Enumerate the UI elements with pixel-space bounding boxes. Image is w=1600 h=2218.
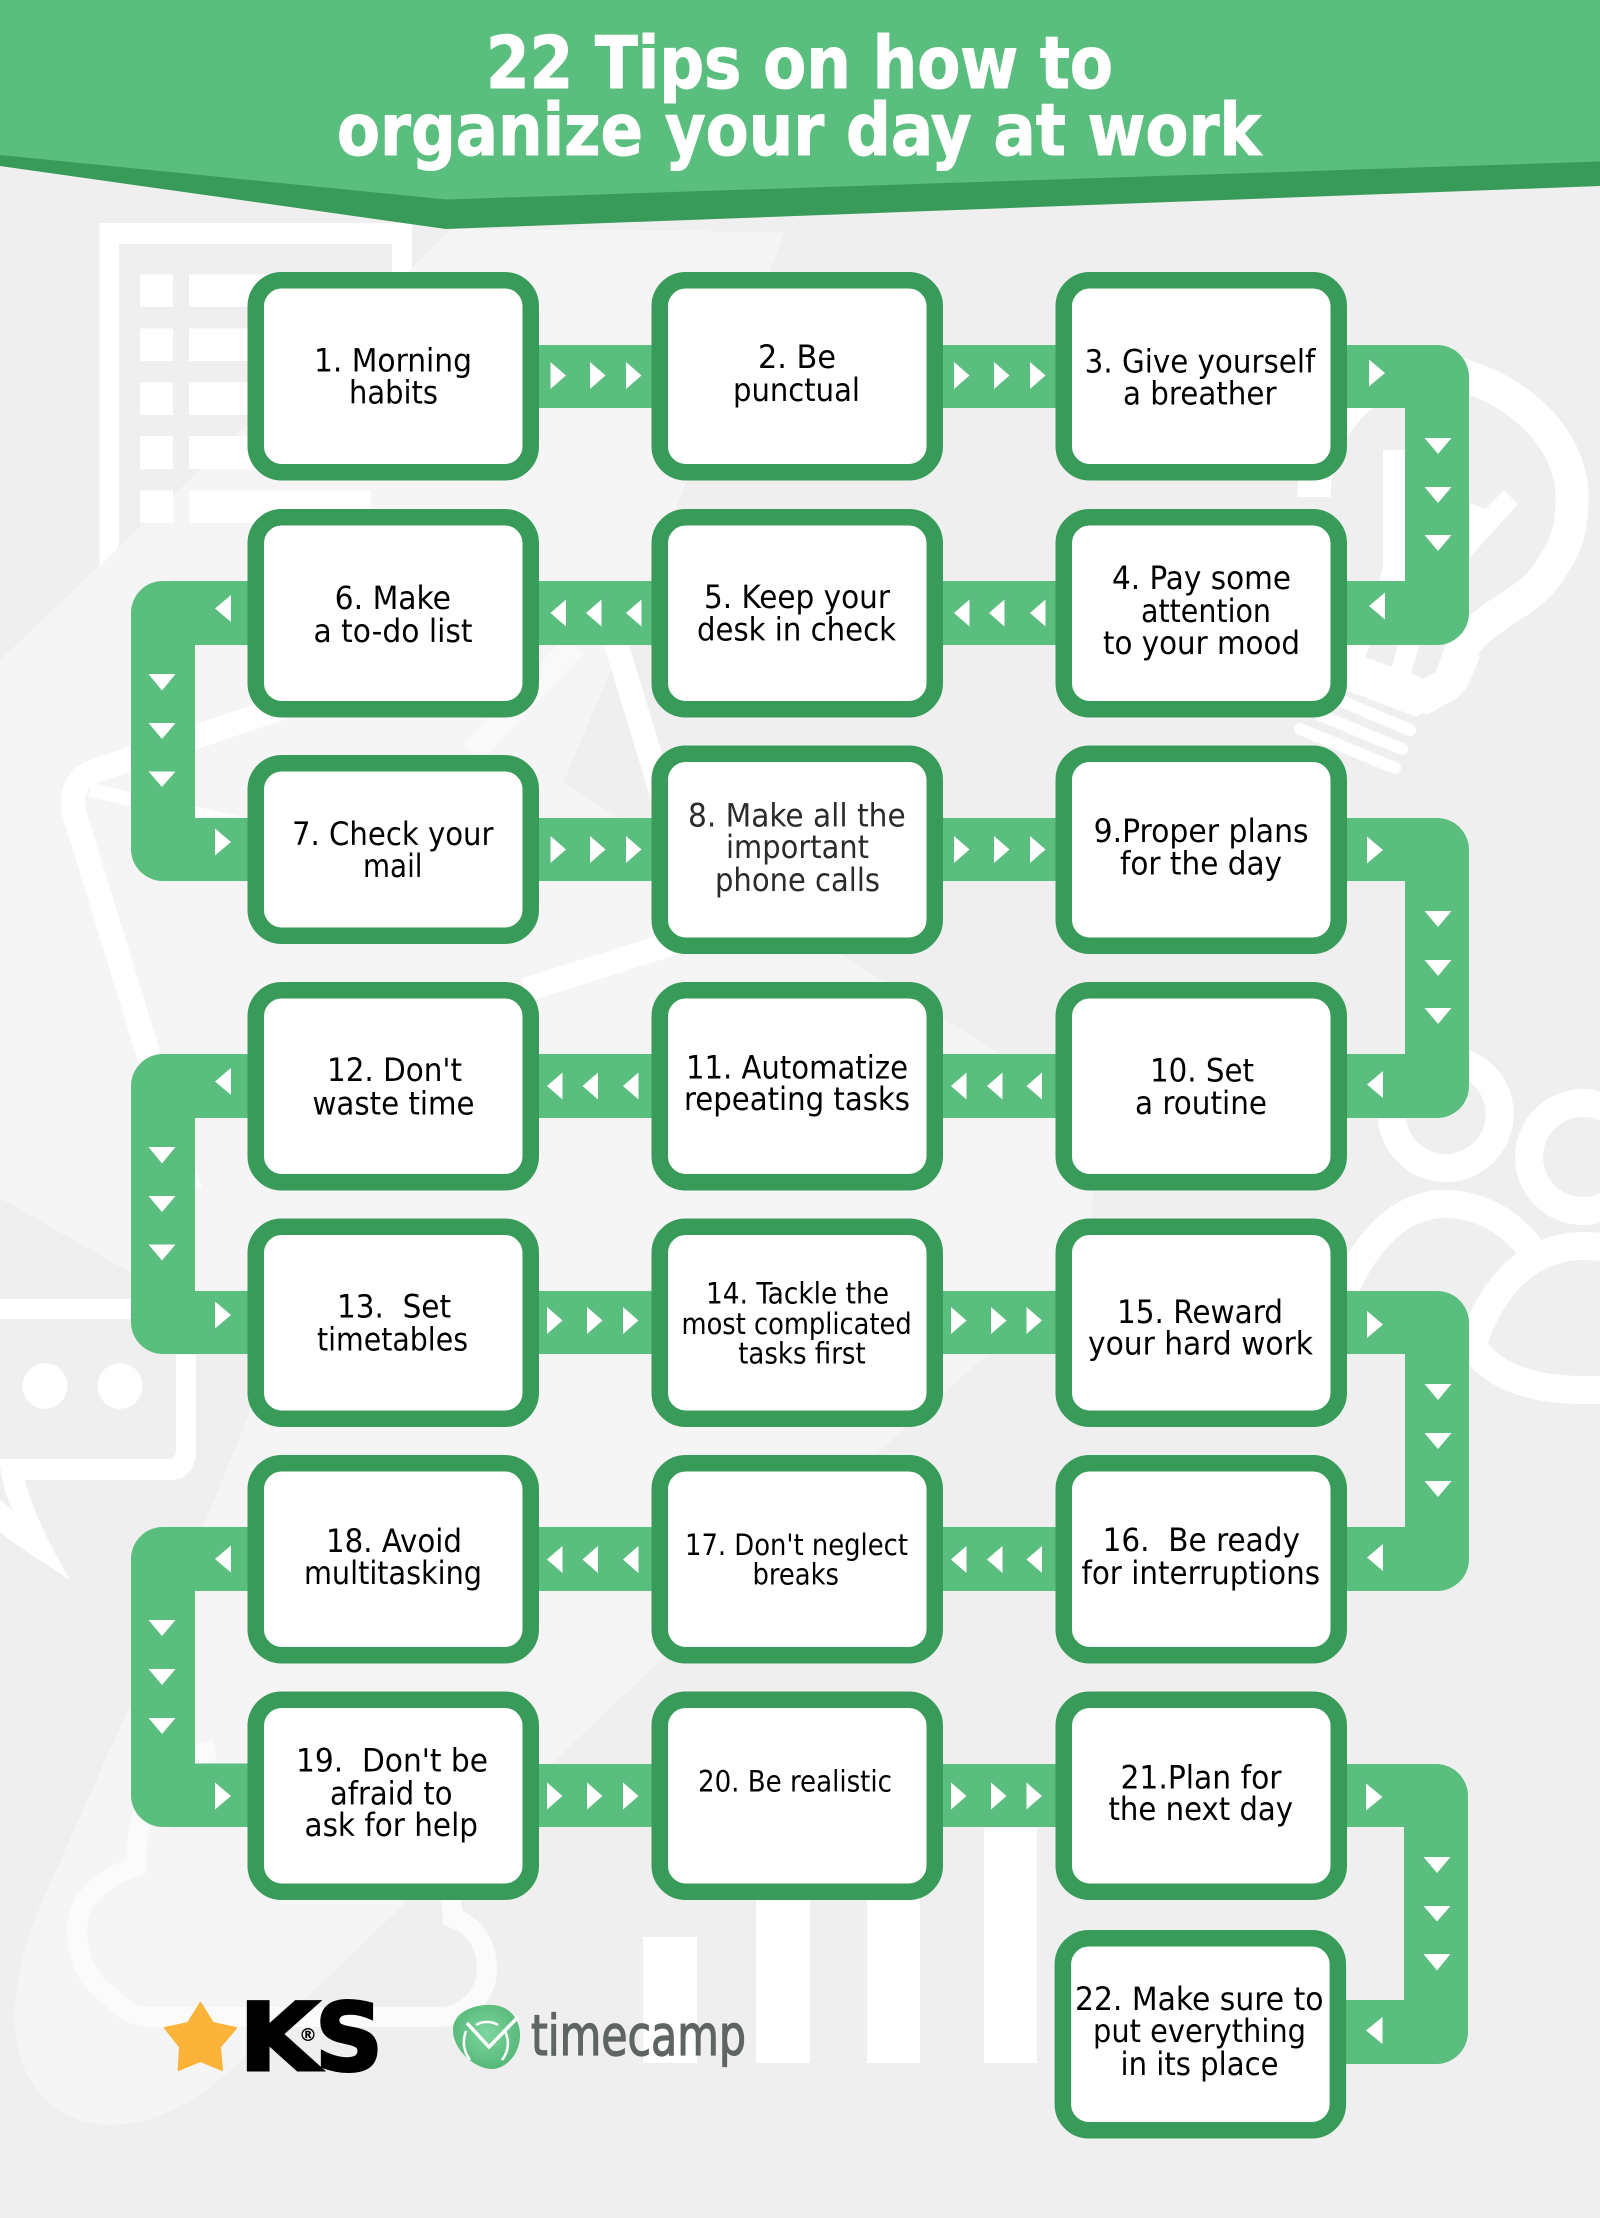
step 19: afraid to	[330, 1775, 452, 1813]
step 22	[1063, 1938, 1338, 2130]
connector: step 17 to 18	[535, 1527, 655, 1591]
step 5	[660, 517, 935, 709]
logo: timecamp	[453, 2004, 746, 2069]
step 6: a to-do list	[314, 612, 472, 650]
step 2	[660, 280, 935, 472]
step 17: 17. Don't neglect	[685, 1528, 908, 1562]
step 11	[660, 990, 935, 1182]
step 16: 16. Be ready	[1103, 1521, 1300, 1559]
connector: step 3 to 4	[1343, 345, 1469, 645]
background icon: light bulb	[1300, 368, 1572, 768]
step 20	[660, 1700, 935, 1892]
step 18: 18. Avoid	[326, 1522, 462, 1560]
background: light diagonal shape	[0, 229, 1093, 2125]
background icon: envelope	[73, 640, 690, 1190]
step 10	[1064, 990, 1339, 1182]
step 11: repeating tasks	[684, 1080, 910, 1118]
connector: step 21 to 22	[1343, 1764, 1468, 2064]
connector: step 2 to 3	[939, 345, 1059, 408]
step 19	[256, 1700, 531, 1892]
step 3: a breather	[1123, 374, 1277, 412]
connector: step 14 to 15	[939, 1291, 1059, 1354]
step 13: 13. Set	[337, 1288, 451, 1326]
step 17: breaks	[752, 1557, 839, 1591]
icon: star	[165, 2003, 236, 2070]
step 22: in its place	[1120, 2045, 1278, 2083]
connector: step 7 to 8	[535, 818, 655, 881]
step 20: 20. Be realistic	[698, 1764, 892, 1798]
step 7: mail	[363, 847, 422, 885]
connector: step 9 to 10	[1343, 818, 1469, 1118]
connector: step 5 to 6	[535, 581, 655, 645]
connector: step 4 to 5	[939, 581, 1059, 645]
step 8: 8. Make all the	[688, 797, 906, 835]
step 4: to your mood	[1103, 624, 1300, 662]
step 14: 14. Tackle the	[706, 1277, 889, 1311]
step 6: 6. Make	[335, 579, 451, 617]
step 9	[1064, 754, 1339, 946]
step 15: 15. Reward	[1117, 1293, 1283, 1331]
step 2: 2. Be	[758, 338, 836, 376]
step 8: important	[726, 828, 869, 866]
step 8: phone calls	[715, 861, 880, 899]
step 7: 7. Check your	[292, 815, 494, 853]
title: 22 Tips on how to	[486, 21, 1113, 105]
step 7	[256, 763, 531, 936]
connector: step 13 to 14	[535, 1291, 655, 1354]
title	[337, 21, 1263, 172]
connector: step 10 to 11	[939, 1054, 1059, 1118]
title: organize your day at work	[337, 88, 1263, 172]
step 18: multitasking	[304, 1554, 482, 1592]
connector: step 20 to 21	[939, 1764, 1059, 1827]
step 21: the next day	[1108, 1790, 1293, 1828]
logo: KS	[165, 1984, 383, 2093]
step 19: ask for help	[304, 1806, 478, 1844]
step 17	[660, 1463, 935, 1655]
step 1	[256, 280, 531, 472]
connector: step 16 to 17	[939, 1527, 1059, 1591]
step 14: most complicated	[682, 1307, 912, 1341]
step 15	[1064, 1227, 1339, 1419]
logo: KS: S	[315, 1984, 383, 2093]
step 5: desk in check	[697, 611, 896, 649]
connector: step 15 to 16	[1343, 1291, 1469, 1591]
step 15: your hard work	[1088, 1324, 1313, 1362]
step 12: 12. Don't	[327, 1051, 462, 1089]
background icon: calendar	[100, 223, 412, 566]
connector: step 1 to 2	[535, 345, 655, 408]
step 8	[660, 754, 935, 946]
step 9: 9.Proper plans	[1094, 812, 1309, 850]
icon: timecamp pin	[453, 2005, 520, 2069]
background icon: people	[1340, 1060, 1600, 1390]
step 5: 5. Keep your	[704, 578, 890, 616]
step 21	[1064, 1700, 1339, 1892]
background icon: bar chart	[643, 1800, 1037, 2063]
background icon: cloud	[77, 1750, 487, 2017]
step 9: for the day	[1120, 844, 1282, 882]
step 4: 4. Pay some	[1112, 559, 1291, 597]
step 14: tasks first	[738, 1336, 866, 1370]
step 11: 11. Automatize	[686, 1049, 908, 1087]
header banner	[0, 0, 1600, 229]
step 12	[256, 990, 531, 1182]
step 18	[256, 1463, 531, 1655]
step 14	[660, 1227, 935, 1419]
step 13	[256, 1227, 531, 1419]
connector: step 8 to 9	[939, 818, 1059, 881]
step 12: waste time	[312, 1084, 474, 1122]
step 4	[1064, 517, 1339, 709]
step 19: 19. Don't be	[296, 1742, 488, 1780]
connector: step 18 to 19	[131, 1527, 251, 1827]
connector: step 12 to 13	[131, 1054, 251, 1354]
step 22: 22. Make sure to	[1075, 1980, 1324, 2018]
step 10: 10. Set	[1150, 1052, 1254, 1090]
logo: KS: ®	[299, 2025, 317, 2046]
step 4: attention	[1141, 592, 1271, 630]
logo: KS: K	[239, 1984, 322, 2093]
step 10: a routine	[1135, 1084, 1267, 1122]
connector: step 6 to 7	[131, 581, 251, 881]
step 1: 1. Morning	[314, 342, 472, 380]
connector: step 19 to 20	[535, 1764, 655, 1827]
step 2: punctual	[733, 371, 860, 409]
step 16	[1064, 1463, 1339, 1655]
step 13: timetables	[317, 1321, 468, 1359]
step 1: habits	[349, 374, 438, 412]
step 16: for interruptions	[1082, 1554, 1320, 1592]
step 22: put everything	[1093, 2012, 1306, 2050]
logo: timecamp: timecamp	[531, 2004, 746, 2069]
step 3: 3. Give yourself	[1085, 342, 1316, 380]
connector: step 11 to 12	[535, 1054, 655, 1118]
step 21: 21.Plan for	[1120, 1758, 1282, 1796]
step 3	[1064, 280, 1339, 472]
background icon: chat bubble	[0, 1299, 196, 1580]
step 6	[256, 517, 531, 709]
